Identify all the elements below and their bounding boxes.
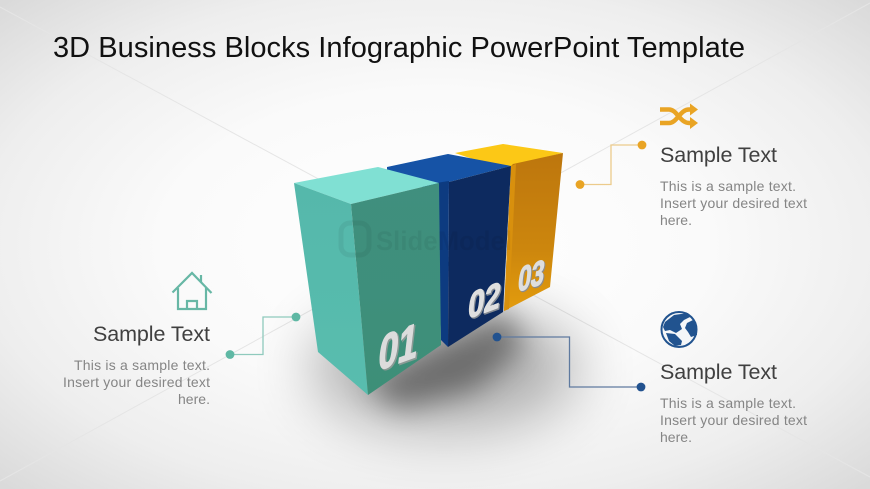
text block: left <box>63 322 210 407</box>
text block: left: here. <box>178 391 210 407</box>
text block: bottom right: here. <box>660 429 692 445</box>
connector: blue <box>493 333 645 391</box>
number 01: 01 <box>377 313 423 383</box>
connector: teal <box>226 313 300 359</box>
icon: shuffle arrows <box>660 104 698 129</box>
number 03: 03 <box>517 253 548 301</box>
text block: left: Insert your desired text <box>63 374 210 390</box>
text block: top right: Insert your desired text <box>660 195 807 211</box>
text block: top right: Sample Text <box>660 143 777 167</box>
text block: top right: This is a sample text. <box>660 178 796 194</box>
text block: left: This is a sample text. <box>74 357 210 373</box>
text block: top right: here. <box>660 212 692 228</box>
icon: house <box>172 273 212 309</box>
text block: bottom right: Sample Text <box>660 360 777 384</box>
ground shadow <box>310 306 580 430</box>
text block: top right <box>660 143 807 228</box>
number 02: 02 <box>467 276 504 329</box>
number 01: 01 <box>376 311 421 382</box>
text block: bottom right: This is a sample text. <box>660 395 796 411</box>
text block: left: Sample Text <box>93 322 210 346</box>
number 03 <box>516 252 548 301</box>
watermark: SlideModel <box>376 226 512 256</box>
title: 3D Business Blocks Infographic PowerPoint Template <box>53 32 745 64</box>
text block: bottom right: Insert your desired text <box>660 412 807 428</box>
icon: globe <box>662 312 697 347</box>
block 02: navy <box>387 154 511 347</box>
number 02: 02 <box>466 275 503 328</box>
block 03: orange <box>455 144 563 311</box>
text block: bottom right <box>660 360 807 445</box>
connector: orange <box>576 141 646 189</box>
block 01: teal <box>294 167 441 395</box>
watermark <box>341 223 512 256</box>
number 03: 03 <box>516 252 547 300</box>
